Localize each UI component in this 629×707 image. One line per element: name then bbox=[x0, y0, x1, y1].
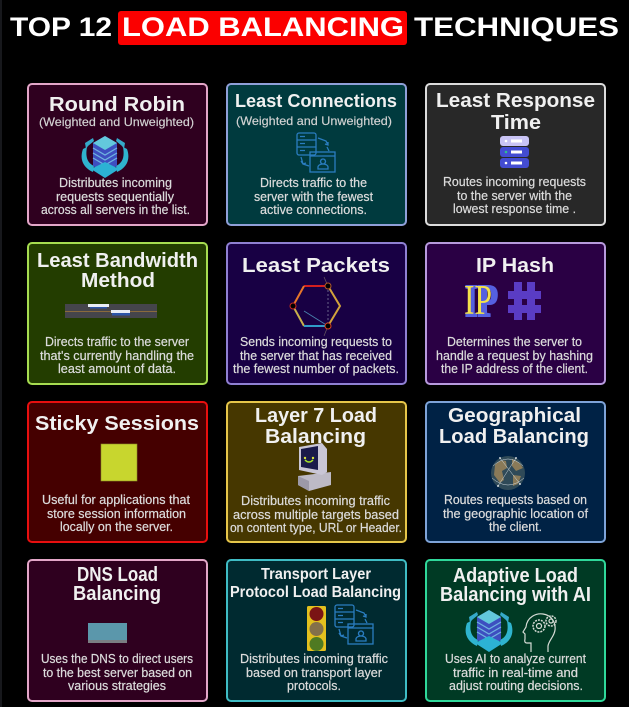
description: transport layer protocol load balancing: Distributes incoming traffic bbox=[240, 652, 388, 666]
description: adaptive load balancing with ai: traffic in real-time and bbox=[453, 666, 578, 680]
heading: least bandwidth method: Method bbox=[81, 269, 155, 292]
description: least bandwidth method: least amount of data. bbox=[58, 362, 176, 376]
description: least response time: lowest response time . bbox=[453, 202, 576, 216]
panel: ip hash bbox=[426, 243, 605, 384]
panel: least bandwidth method bbox=[28, 243, 207, 384]
description: least packets bbox=[233, 335, 399, 376]
heading: sticky sessions: Sticky Sessions bbox=[35, 412, 199, 435]
description: layer 7 load balancing: across multiple targets based bbox=[233, 508, 399, 522]
description: geographical load balancing: Routes requests based on bbox=[444, 493, 587, 507]
heading: transport layer protocol load balancing bbox=[230, 566, 401, 601]
icon: network globe bbox=[491, 456, 525, 490]
description: dns load balancing: to the best server based on bbox=[43, 666, 192, 680]
description: least packets: Sends incoming requests to bbox=[240, 335, 392, 349]
description: geographical load balancing: the client. bbox=[489, 520, 542, 534]
description: sticky sessions: locally on the server. bbox=[60, 520, 173, 534]
description: adaptive load balancing with ai: adjust routing decisions. bbox=[449, 679, 583, 693]
heading: layer 7 load balancing: Balancing bbox=[265, 425, 366, 448]
icon: retro computer bbox=[298, 443, 331, 491]
description: sticky sessions: store session information bbox=[47, 507, 186, 521]
heading: layer 7 load balancing: Layer 7 Load bbox=[255, 404, 377, 427]
heading: least connections: (Weighted and Unweighted) bbox=[236, 114, 392, 128]
description: least connections: server with the fewest bbox=[254, 190, 374, 204]
icon: ip letters: IP bbox=[464, 278, 492, 324]
icon: monitor bbox=[88, 623, 127, 643]
heading: least response time: Least Response bbox=[436, 89, 595, 112]
description: ip hash bbox=[436, 335, 593, 376]
title: LOAD BALANCING bbox=[122, 12, 404, 42]
heading: adaptive load balancing with ai: Adaptive Load bbox=[453, 564, 578, 587]
description: transport layer protocol load balancing: protocols. bbox=[287, 679, 341, 693]
description: round robin bbox=[41, 176, 190, 217]
description: layer 7 load balancing: on content type, URL or Header. bbox=[230, 521, 402, 535]
heading: least connections bbox=[235, 90, 397, 128]
description: ip hash: Determines the server to bbox=[447, 335, 582, 349]
heading: adaptive load balancing with ai: Balancing with AI bbox=[440, 583, 591, 606]
heading: least bandwidth method: Least Bandwidth bbox=[37, 249, 198, 272]
description: round robin: requests sequentially bbox=[56, 190, 175, 204]
heading: ip hash: IP Hash bbox=[476, 254, 554, 277]
heading: dns load balancing: Balancing bbox=[73, 582, 161, 605]
description: least bandwidth method bbox=[40, 335, 194, 376]
panel: sticky sessions bbox=[28, 402, 207, 542]
icon: ai head with gears bbox=[523, 614, 556, 652]
description: least connections: active connections. bbox=[260, 203, 367, 217]
description: adaptive load balancing with ai: Uses AI to analyze current bbox=[445, 652, 587, 666]
icon: server stack bbox=[500, 136, 529, 168]
heading: geographical load balancing: Geographical bbox=[448, 404, 581, 427]
icon: traffic light bbox=[307, 606, 326, 651]
icon: server to client bbox=[335, 605, 373, 644]
description: least connections: Directs traffic to the bbox=[260, 176, 367, 190]
panel: least response time bbox=[426, 84, 605, 225]
description: dns load balancing bbox=[41, 652, 193, 693]
description: sticky sessions bbox=[42, 493, 191, 534]
icon: server cube bbox=[466, 610, 512, 652]
heading: round robin: Round Robin bbox=[49, 93, 185, 116]
description: least bandwidth method: Directs traffic to the server bbox=[45, 335, 189, 349]
description: transport layer protocol load balancing: based on transport layer bbox=[246, 666, 382, 680]
description: layer 7 load balancing bbox=[230, 494, 402, 535]
panel: transport layer protocol load balancing bbox=[227, 560, 406, 701]
heading: least response time: Time bbox=[491, 111, 541, 134]
heading: round robin: (Weighted and Unweighted) bbox=[39, 115, 194, 129]
heading: least response time bbox=[436, 89, 595, 134]
heading: round robin bbox=[39, 93, 194, 129]
description: least response time bbox=[443, 175, 586, 216]
description: least packets: the server that has received bbox=[240, 349, 392, 363]
heading: least connections: Least Connections bbox=[235, 90, 397, 111]
panel: geographical load balancing bbox=[426, 402, 605, 542]
description: least packets: the fewest number of packets. bbox=[233, 362, 399, 376]
description: geographical load balancing bbox=[443, 493, 589, 534]
description: ip hash: handle a request by hashing bbox=[436, 349, 593, 363]
description: transport layer protocol load balancing bbox=[240, 652, 388, 693]
panel: least connections bbox=[227, 84, 406, 225]
heading: least packets: Least Packets bbox=[242, 254, 390, 277]
heading: geographical load balancing: Load Balancing bbox=[439, 425, 589, 448]
title bbox=[10, 11, 619, 45]
title: TOP 12 bbox=[10, 12, 112, 42]
description: dns load balancing: Uses the DNS to direct users bbox=[41, 652, 193, 666]
icon: server cube bbox=[82, 136, 128, 178]
description: layer 7 load balancing: Distributes incoming traffic bbox=[241, 494, 390, 508]
icon: server to client bbox=[297, 133, 335, 172]
description: least connections bbox=[254, 176, 374, 217]
description: adaptive load balancing with ai bbox=[445, 652, 587, 693]
icon: sticky note bbox=[101, 444, 137, 481]
description: geographical load balancing: the geographic location of bbox=[443, 507, 589, 521]
heading: least bandwidth method bbox=[37, 249, 198, 292]
description: sticky sessions: Useful for applications that bbox=[42, 493, 191, 507]
panel: adaptive load balancing with ai bbox=[426, 560, 605, 701]
description: least bandwidth method: that's currently handling the bbox=[40, 349, 194, 363]
icon: road with buses bbox=[65, 304, 157, 318]
title: TECHNIQUES bbox=[414, 12, 619, 42]
description: ip hash: the IP address of the client. bbox=[441, 362, 588, 376]
heading: dns load balancing bbox=[73, 563, 161, 605]
panel: least packets bbox=[227, 243, 406, 384]
panel: round robin bbox=[28, 84, 207, 225]
description: dns load balancing: various strategies bbox=[68, 679, 166, 693]
heading: transport layer protocol load balancing: Transport Layer bbox=[261, 566, 371, 583]
panel: layer 7 load balancing bbox=[227, 402, 406, 542]
heading: dns load balancing: DNS Load bbox=[77, 563, 158, 586]
heading: adaptive load balancing with ai bbox=[440, 564, 591, 606]
description: round robin: Distributes incoming bbox=[59, 176, 172, 190]
description: least response time: Routes incoming requests bbox=[443, 175, 586, 189]
description: round robin: across all servers in the list. bbox=[41, 203, 190, 217]
heading: geographical load balancing bbox=[439, 404, 589, 448]
icon: hash bbox=[508, 282, 541, 320]
description: least response time: to the server with the bbox=[457, 189, 572, 203]
heading: transport layer protocol load balancing: Protocol Load Balancing bbox=[230, 584, 401, 601]
heading: layer 7 load balancing bbox=[255, 404, 377, 448]
icon: packet hexagon bbox=[290, 277, 340, 336]
panel: dns load balancing bbox=[28, 560, 207, 701]
icon: ip letters: IP bbox=[465, 275, 498, 326]
